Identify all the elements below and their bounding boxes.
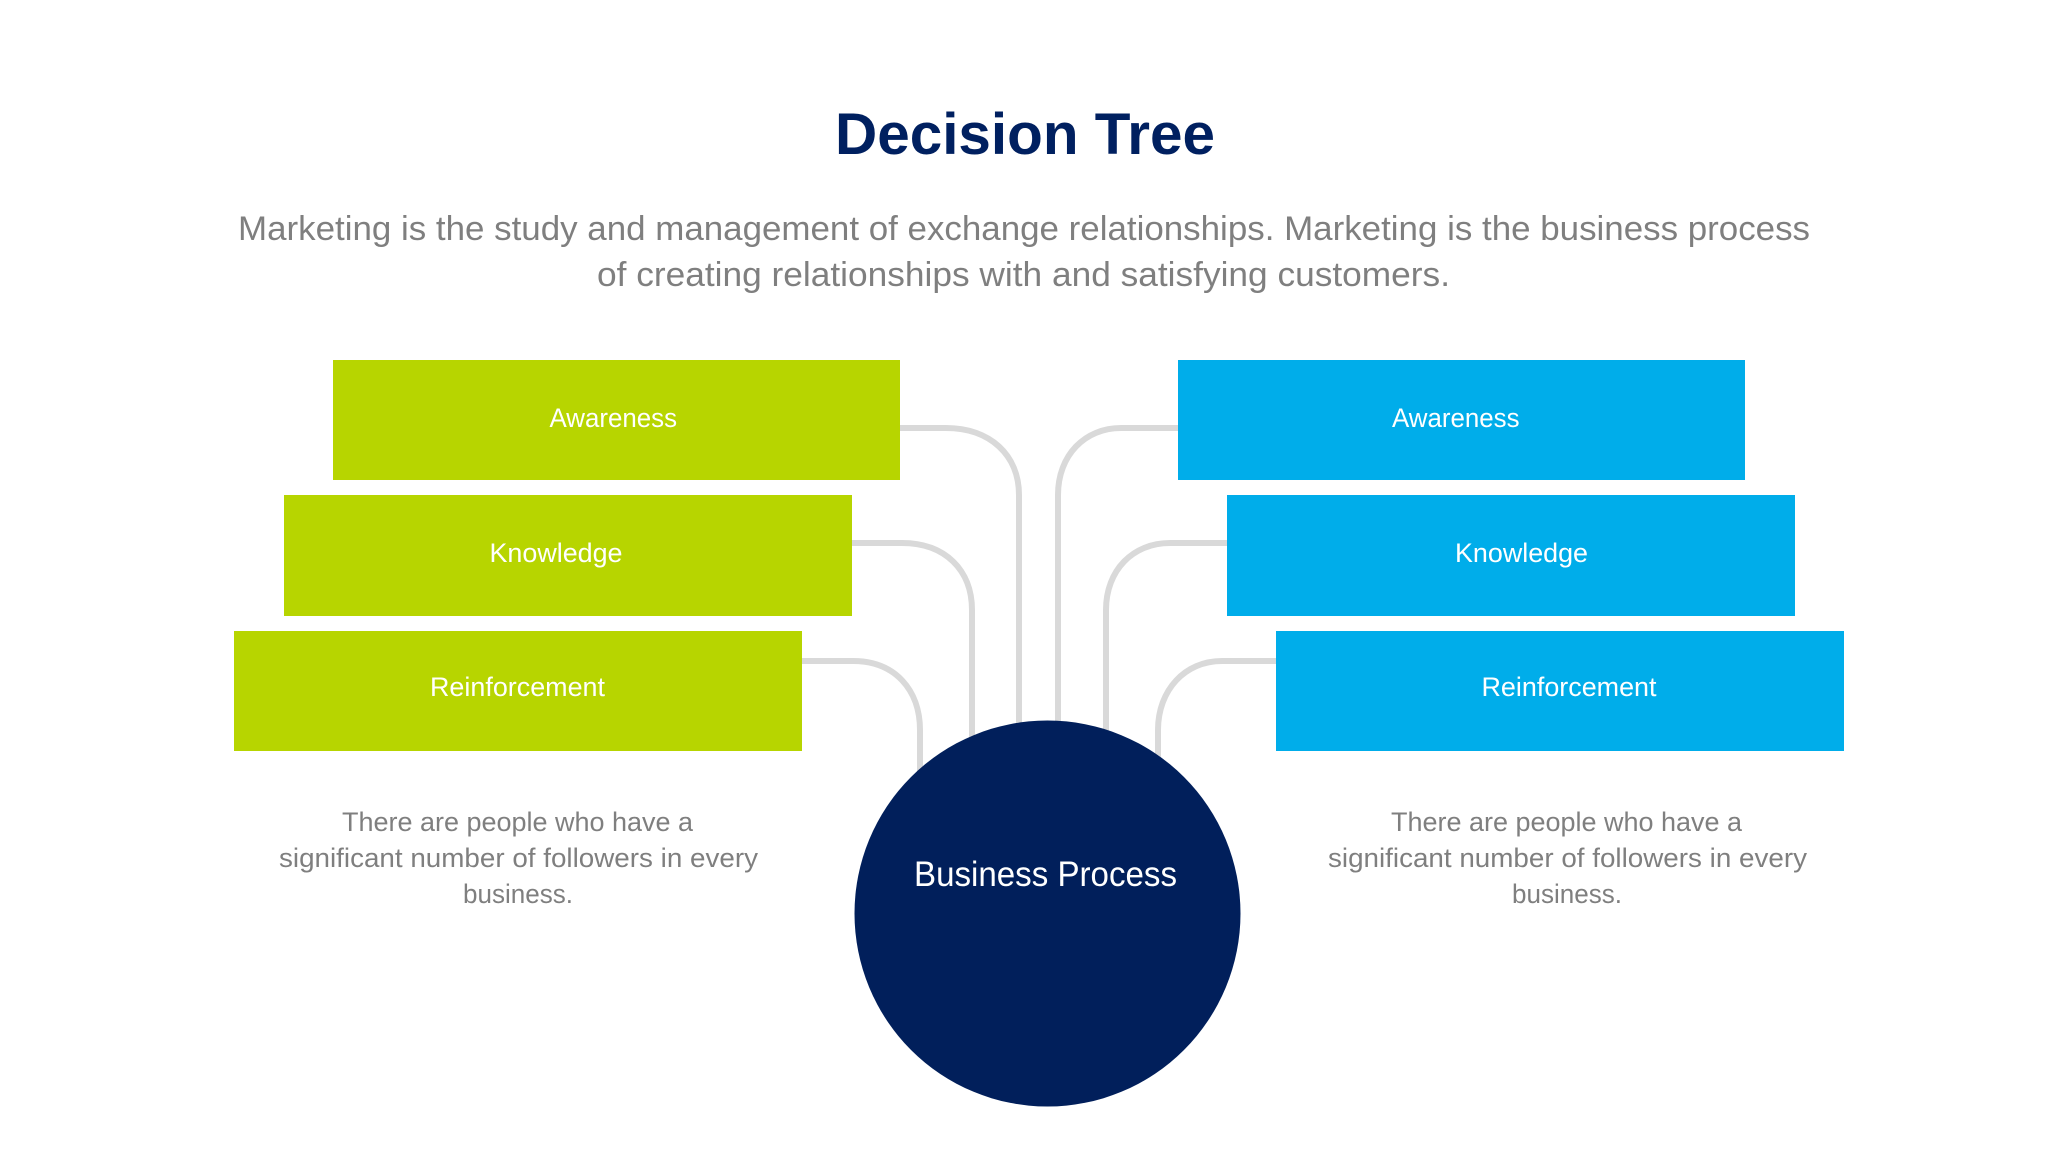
green box: Reinforcement: Reinforcement xyxy=(430,672,605,702)
left description text: There are people who have a xyxy=(342,807,694,837)
green box: Awareness xyxy=(333,360,900,480)
right description text: There are people who have a xyxy=(1391,807,1743,837)
connector lines: right xyxy=(1058,428,1276,780)
left description text xyxy=(279,807,759,909)
title: Decision Tree xyxy=(835,102,1215,167)
left description text: significant number of followers in every xyxy=(279,843,759,873)
blue box: Reinforcement: Reinforcement xyxy=(1482,672,1657,702)
blue box: Reinforcement xyxy=(1276,631,1844,751)
central circle: Business Process xyxy=(854,720,1240,1106)
connector lines: left xyxy=(802,428,1019,780)
central circle: Business Process: Business Process xyxy=(914,855,1177,894)
right description text: significant number of followers in every xyxy=(1328,843,1808,873)
subtitle text block: of creating relationships with and satisfying customers. xyxy=(597,256,1450,294)
subtitle text block xyxy=(238,210,1810,294)
blue box: Knowledge xyxy=(1227,495,1795,616)
blue box: Awareness xyxy=(1178,360,1745,480)
blue box: Knowledge: Knowledge xyxy=(1455,538,1588,568)
right description text xyxy=(1328,807,1808,909)
subtitle text block: Marketing is the study and management of exchange relationships. Marketing is the business process xyxy=(238,210,1810,248)
blue box: Awareness: Awareness xyxy=(1392,403,1520,433)
right description text: business. xyxy=(1512,879,1622,909)
green box: Reinforcement xyxy=(234,631,802,751)
green box: Awareness: Awareness xyxy=(550,403,677,433)
left description text: business. xyxy=(463,879,573,909)
green box: Knowledge: Knowledge xyxy=(490,538,622,568)
green box: Knowledge xyxy=(284,495,852,616)
